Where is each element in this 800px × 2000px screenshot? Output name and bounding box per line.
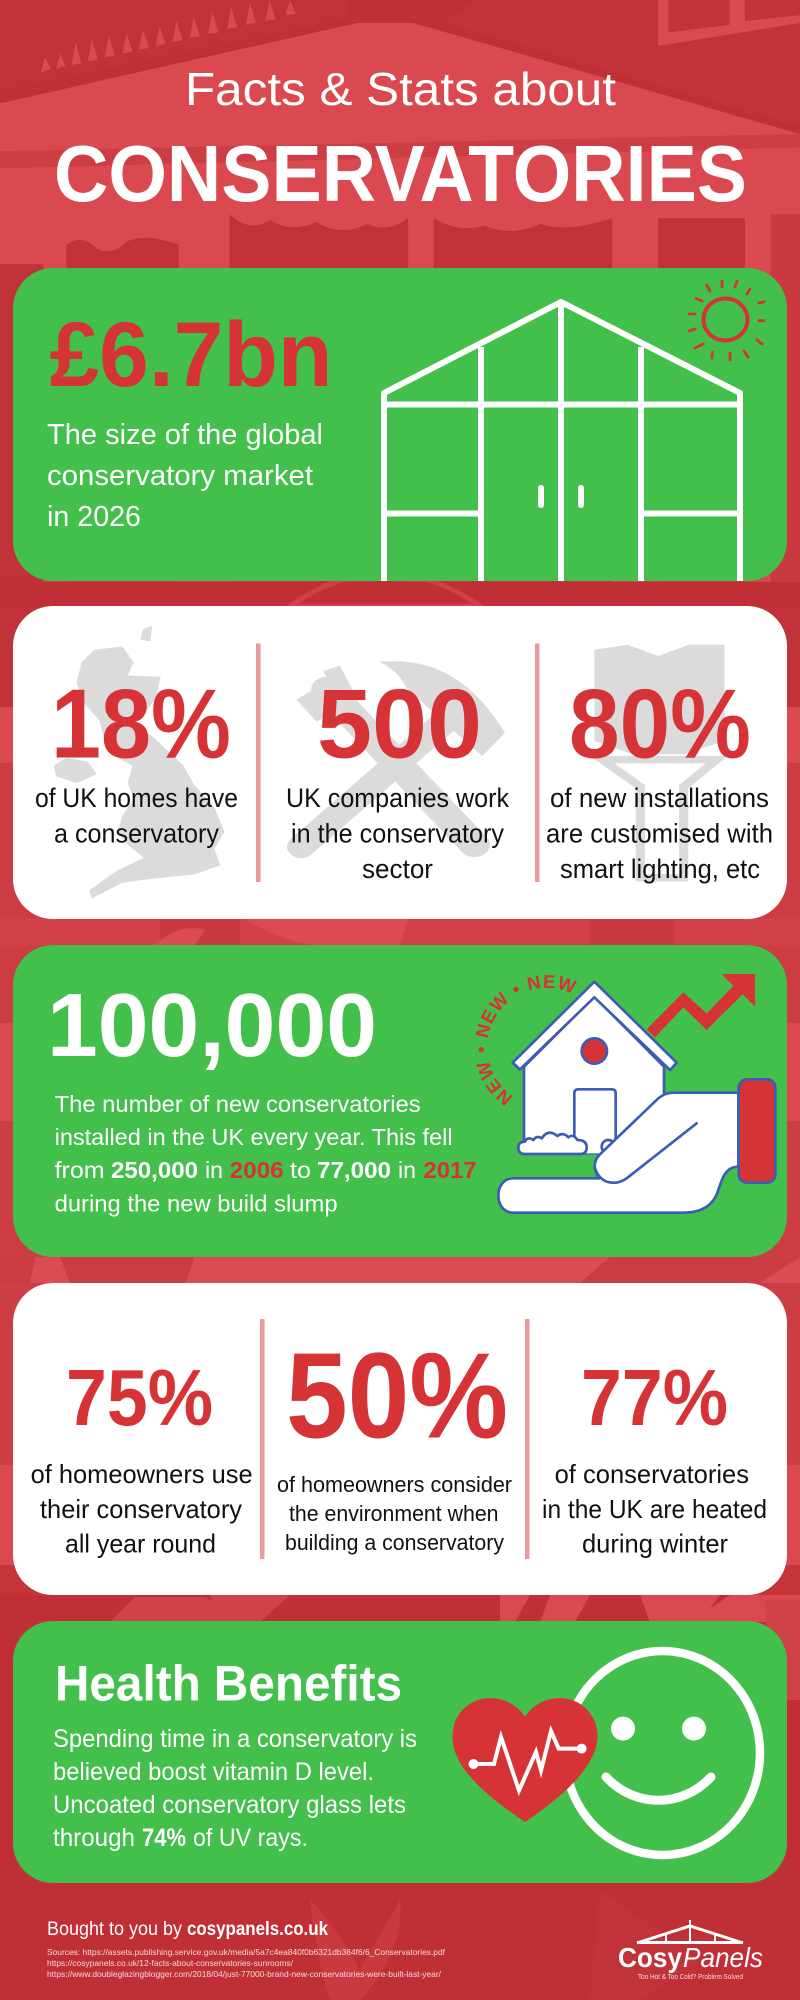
stat: 80%: smart lighting, etc (560, 854, 760, 884)
text: new conservatories description: during the new build slump (55, 1190, 338, 1216)
logo: CosyPanels: Panels (683, 1942, 763, 1973)
stat: 50%: building a conservatory (285, 1530, 504, 1555)
text: health description (53, 1725, 417, 1852)
panel: homeowner stats (13, 1283, 787, 1595)
stat: 80%: of new installations (550, 783, 769, 813)
footer sources: Sources: https://assets.publishing.service.gov.uk/media/5a7c4ea840f0b6321db384f6/6_Conservatories.pdf (47, 1947, 446, 1957)
stat: 75%: their conservatory (40, 1494, 242, 1524)
text: new conservatories description (55, 1091, 476, 1216)
text: health description: Uncoated conservatory glass lets (53, 1791, 406, 1819)
text: health description: 74% (142, 1824, 186, 1852)
stat: 50%: the environment when (289, 1501, 498, 1526)
stat: 80%: 80% (569, 668, 751, 778)
text: health description: through (53, 1824, 135, 1852)
panel: market size (13, 268, 787, 581)
stat: 77%: in the UK are heated (542, 1494, 767, 1524)
icon: crossed tools watermark (301, 663, 503, 847)
text: new conservatories description: 2006 (230, 1157, 284, 1183)
text: new conservatories description: The number of new conservatories (55, 1091, 421, 1117)
stat: 75%: 75% (66, 1353, 213, 1442)
stat: 50%: of homeowners consider (277, 1472, 512, 1497)
stat: 80%: are customised with (546, 818, 773, 848)
icon: smiley face (565, 1651, 760, 1855)
text: health description: Spending time in a conservatory is (53, 1725, 417, 1753)
text: market description: conservatory market (47, 460, 313, 492)
stat: 75%: of homeowners use (31, 1459, 253, 1489)
text: new conservatories description: 77,000 (317, 1157, 391, 1183)
text: new conservatories description: to (290, 1157, 311, 1183)
footer sources (47, 1947, 446, 1979)
stat: 18%: of UK homes have (35, 783, 238, 813)
title (54, 63, 747, 218)
stat: 18% (35, 668, 238, 848)
text: health description: believed boost vitamin D level. (53, 1758, 374, 1786)
logo: CosyPanels: Too Hot & Too Cold? Problem Solved (638, 1974, 743, 1981)
text: new conservatories description: from (55, 1157, 105, 1183)
stat: 500: sector (362, 854, 433, 884)
stat: £6.7bn: £6.7bn (50, 304, 332, 406)
logo: CosyPanels: Cosy (618, 1942, 682, 1973)
stat: 75%: all year round (65, 1529, 216, 1559)
title: CONSERVATORIES (54, 129, 747, 218)
icon: house held in a hand (498, 982, 775, 1213)
stat: 50% (277, 1328, 512, 1555)
stat: 500: in the conservatory (291, 818, 504, 848)
stat: 80% (546, 668, 773, 884)
text: new conservatories description: 2017 (424, 1157, 476, 1183)
footer sources: https://cosypanels.co.uk/12-facts-about-conservatories-sunrooms/ (47, 1958, 294, 1968)
panel: health benefits (13, 1621, 787, 1883)
icon: conservatory outline (384, 302, 740, 581)
stat: 77%: during winter (582, 1529, 728, 1559)
stat: 50%: 50% (286, 1328, 508, 1464)
stat: 18%: 18% (51, 668, 231, 778)
logo: CosyPanels (618, 1920, 763, 1981)
icon: paintbrush watermark (594, 645, 724, 878)
panel: new conservatories (13, 945, 787, 1257)
footer sources: https://www.doubleglazingblogger.com/2018/04/just-77000-brand-new-conservatories-were-built-last-year/ (47, 1969, 442, 1979)
stat: 18%: a conservatory (54, 818, 219, 848)
footer credit: Bought to you by (47, 1919, 182, 1940)
icon: sun (689, 281, 764, 360)
footer credit: cosypanels.co.uk (187, 1919, 328, 1940)
text: health description: of UV rays. (193, 1824, 308, 1852)
title: Facts & Stats about (185, 63, 616, 115)
icon: UK map watermark (54, 626, 224, 899)
text: new conservatories description: in (205, 1157, 223, 1183)
text: new conservatories description: installed in the UK every year. This fell (55, 1124, 453, 1150)
text: market description: The size of the global (47, 419, 323, 451)
stat: 77%: 77% (581, 1353, 728, 1442)
text: market description: in 2026 (47, 501, 141, 533)
stat: 500: UK companies work (286, 783, 509, 813)
heading: Health Benefits: Health Benefits (55, 1656, 402, 1712)
footer credit (47, 1919, 328, 1940)
stat: 500 (286, 668, 509, 884)
panel: UK stats (13, 606, 787, 919)
icon: circular NEW text: NEW • NEW • NEW (476, 975, 577, 1106)
stat: 100,000: 100,000 (47, 976, 377, 1076)
stat: 77%: of conservatories (555, 1459, 749, 1489)
stat: 75% (31, 1353, 253, 1559)
stat: 500: 500 (317, 668, 482, 778)
text: market description (47, 419, 323, 533)
stat: 77% (542, 1353, 767, 1559)
text: new conservatories description: 250,000 (111, 1157, 198, 1183)
icon: heart with pulse (453, 1698, 597, 1822)
icon: rising arrow (647, 974, 755, 1037)
text: new conservatories description: in (398, 1157, 416, 1183)
